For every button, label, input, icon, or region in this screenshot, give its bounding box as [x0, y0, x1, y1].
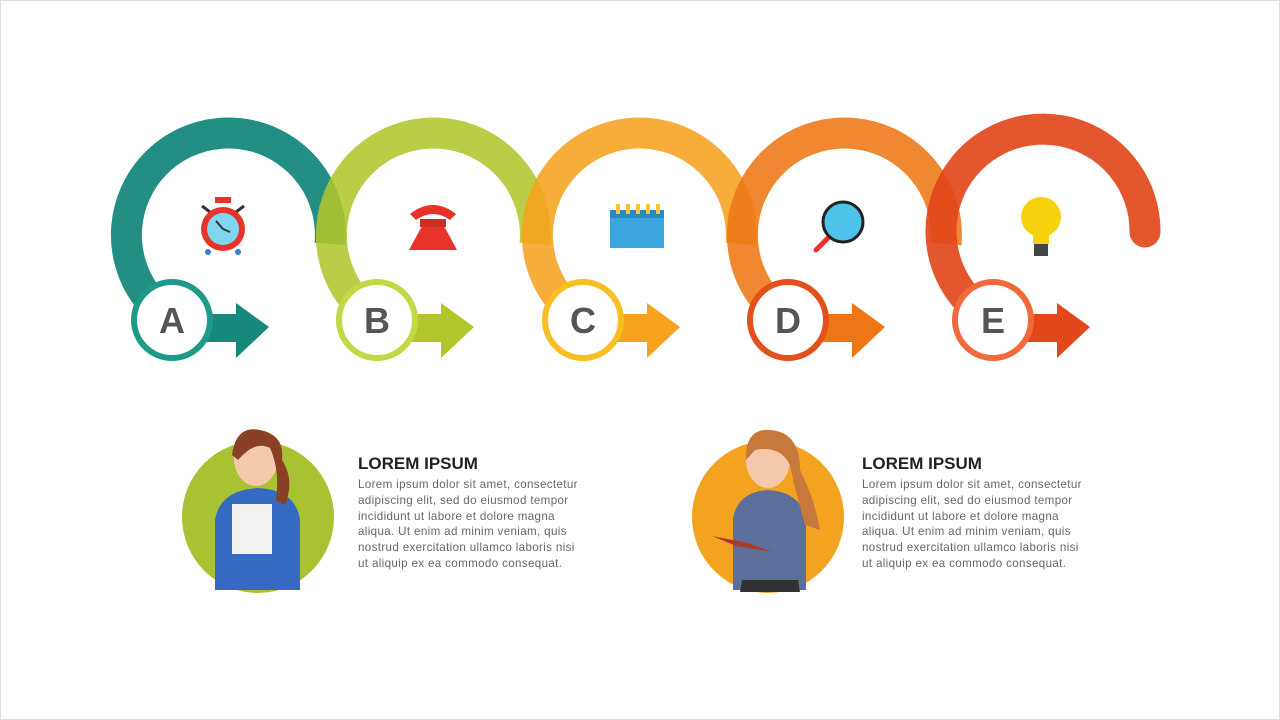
- arrow C: [583, 303, 680, 358]
- arrow B: [377, 303, 474, 358]
- panel text 1 body: incididunt ut labore et dolore magna: [358, 510, 555, 523]
- panel text 1 body: adipiscing elit, sed do eiusmod tempor: [358, 494, 569, 507]
- step E arc: [941, 129, 1145, 358]
- icon: alarm clock: [201, 197, 245, 255]
- badge E: E: [981, 300, 1005, 341]
- arrow D: [788, 303, 885, 358]
- panel text 2 body: Lorem ipsum dolor sit amet, consectetur: [862, 478, 1082, 491]
- badge D: D: [775, 300, 801, 341]
- step B arc: [331, 133, 535, 358]
- panel text 1 body: ut aliquip ex ea commodo consequat.: [358, 557, 562, 570]
- badge B: B: [364, 300, 390, 341]
- badge C: C: [570, 300, 596, 341]
- badge B: [339, 282, 415, 358]
- badge C: [545, 282, 621, 358]
- panel text 2 body: ut aliquip ex ea commodo consequat.: [862, 557, 1066, 570]
- panel text 1 heading: LOREM IPSUM: [358, 454, 478, 473]
- icon: magnifier: [816, 202, 863, 250]
- panel text 1 body: Lorem ipsum dolor sit amet, consectetur: [358, 478, 578, 491]
- arrow A: [172, 303, 269, 358]
- step A arc: [126, 133, 330, 358]
- panel text 2 body: adipiscing elit, sed do eiusmod tempor: [862, 494, 1073, 507]
- panel text 1 body: nostrud exercitation ullamco laboris nisi: [358, 541, 575, 554]
- panel text 2 heading: LOREM IPSUM: [862, 454, 982, 473]
- panel text 2 body: aliqua. Ut enim ad minim veniam, quis: [862, 525, 1071, 538]
- portrait: woman with papers: [182, 429, 334, 593]
- step C arc: [537, 133, 741, 358]
- badge A: A: [159, 300, 185, 341]
- step D arc: [742, 133, 946, 358]
- icon: calendar: [610, 204, 664, 248]
- panel text 2 body: nostrud exercitation ullamco laboris nisi: [862, 541, 1079, 554]
- badge A: [134, 282, 210, 358]
- icon: telephone: [409, 205, 457, 250]
- panel text 1 body: aliqua. Ut enim ad minim veniam, quis: [358, 525, 567, 538]
- icon: light bulb: [1021, 197, 1061, 256]
- badge D: [750, 282, 826, 358]
- panel text 2 body: incididunt ut labore et dolore magna: [862, 510, 1059, 523]
- arrow E: [993, 303, 1090, 358]
- panel text 2 body: [862, 478, 1082, 570]
- panel text 1 body: [358, 478, 578, 570]
- badge E: [955, 282, 1031, 358]
- portrait: woman with book: [692, 430, 844, 593]
